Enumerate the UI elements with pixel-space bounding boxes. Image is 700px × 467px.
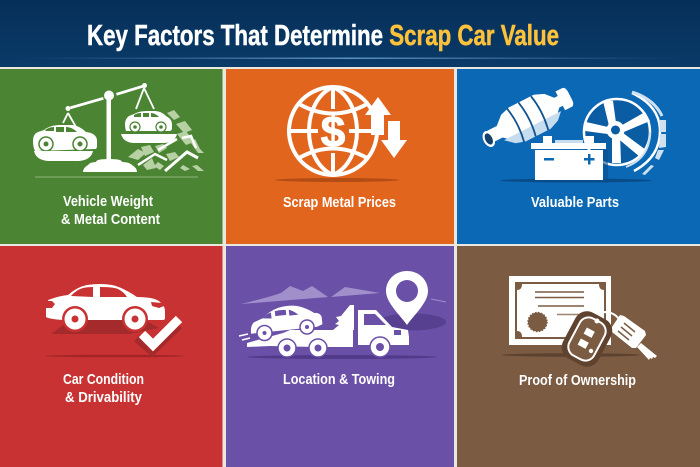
icon: car [46,284,165,334]
scale post and beam [66,83,147,172]
cab [358,310,409,345]
label [61,193,160,228]
icon: catalytic converter [475,80,579,158]
left pan [34,151,93,161]
panel: scrap metal prices [226,69,454,244]
icon: battery [531,136,608,180]
boom [333,305,354,330]
label: Valuable Parts [531,194,619,211]
panel: proof of ownership [457,246,700,467]
left car [33,125,97,151]
label: Proof of Ownership [519,372,636,389]
panel: car condition and drivability [0,246,222,467]
icon: globe with dollar: $ [321,108,345,157]
label: Location & Towing [283,371,395,388]
title: Key Factors That Determine Scrap Car Value [87,20,559,52]
icon: certificate [509,276,611,345]
label [63,371,144,406]
header banner [0,0,700,67]
icon: car key [557,307,657,371]
icon: up arrow [365,97,391,135]
panel: location and towing [226,246,454,467]
label: Car Condition [63,371,144,388]
icon: down arrow [381,121,407,158]
icon: scale with cars and scrap [33,83,204,172]
icon: wheel [584,92,666,175]
label: Vehicle Weight [63,193,153,210]
right car [125,111,172,132]
label: & Drivability [65,389,143,406]
label: Scrap Metal Prices [283,194,396,211]
right pan [121,134,177,143]
mountains [241,286,380,304]
icon: location pin [386,271,428,325]
label: & Metal Content [61,211,160,228]
flatbed [247,330,353,347]
panel: valuable parts [457,69,700,244]
panel: vehicle weight and metal content [0,69,222,244]
icon: check mark [137,319,179,351]
icon: globe with dollar [289,87,377,175]
wheels [278,337,390,357]
car on bed [249,303,323,334]
icon: tow truck [239,303,409,357]
